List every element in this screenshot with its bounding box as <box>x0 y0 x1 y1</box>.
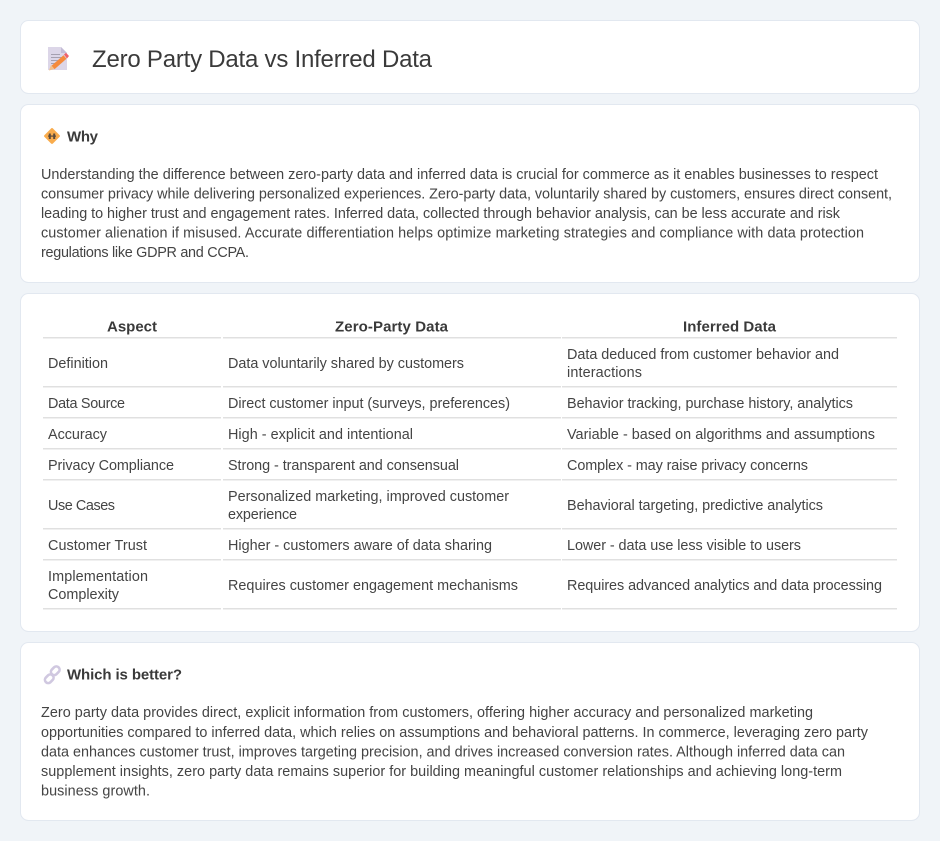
panel: which is better <box>20 642 920 820</box>
row: implementation complexity: Requires advanced analytics and data processing <box>567 578 882 594</box>
table header row <box>43 318 897 338</box>
panel: why <box>20 104 920 282</box>
row: accuracy <box>43 427 897 450</box>
text block: which is better paragraph <box>41 705 869 800</box>
row: privacy compliance: Privacy Compliance <box>48 458 174 474</box>
row: definition: Definition <box>48 356 108 372</box>
row: customer trust: Lower - data use less visible to users <box>567 538 801 554</box>
panel: comparison table <box>20 294 920 632</box>
row: customer trust <box>43 538 897 560</box>
table header row: Aspect <box>107 318 157 336</box>
heading: which is better: Which is better? <box>67 666 182 684</box>
row: accuracy: High - explicit and intentional <box>228 427 413 443</box>
text block: which is better paragraph: data enhances customer trust, improves targeting precision, and drives increased conversion rates. Although inferred data can <box>41 744 845 760</box>
row: use cases: experience <box>228 507 297 523</box>
row: privacy compliance: Strong - transparent and consensual <box>228 458 459 474</box>
row: implementation complexity <box>43 569 897 610</box>
text block: which is better paragraph: business growth. <box>41 784 150 800</box>
text block: why paragraph: leading to higher trust and engagement rates. Inferred data, collected through behavior analysis, can be less accurate and risk <box>41 206 841 222</box>
row: privacy compliance: Complex - may raise privacy concerns <box>567 458 808 474</box>
row: implementation complexity: Requires customer engagement mechanisms <box>228 578 518 594</box>
row: use cases: Use Cases <box>48 498 115 514</box>
title: Zero Party Data vs Inferred Data <box>92 46 433 73</box>
text block: which is better paragraph: Zero party data provides direct, explicit information from customers, offering higher accuracy and personalized marketing <box>41 705 813 721</box>
row: data source <box>43 396 897 418</box>
text block: why paragraph: consumer privacy while delivering personalized experiences. Zero-party data, voluntarily shared by customers, ensures direct consent, <box>41 186 892 202</box>
text block: why paragraph: regulations like GDPR and CCPA. <box>41 245 249 261</box>
row: use cases: Personalized marketing, improved customer <box>228 489 509 505</box>
icon: warning diamond <box>44 128 60 144</box>
text block: which is better paragraph: supplement insights, zero party data remains superior for building meaningful customer relationships and achieving long-term <box>41 764 842 780</box>
row: use cases: Behavioral targeting, predictive analytics <box>567 498 823 514</box>
row: data source: Behavior tracking, purchase history, analytics <box>567 396 853 412</box>
icon: memo and pencil <box>48 47 69 70</box>
text block: why paragraph <box>41 167 892 261</box>
row: definition: Data deduced from customer behavior and <box>567 347 839 363</box>
row: privacy compliance <box>43 458 897 480</box>
row: data source: Data Source <box>48 396 125 412</box>
row: definition: Data voluntarily shared by customers <box>228 356 464 372</box>
row: implementation complexity: Complexity <box>48 587 120 603</box>
row: data source: Direct customer input (surveys, preferences) <box>228 396 510 412</box>
table header row: Inferred Data <box>683 318 777 336</box>
text block: why paragraph: customer alienation if misused. Accurate differentiation helps optimize marketing strategies and compliance with data protection <box>41 226 864 242</box>
row: definition <box>43 347 897 388</box>
row: use cases <box>43 489 897 530</box>
icon: link <box>44 665 61 684</box>
panel: header <box>20 20 920 94</box>
row: implementation complexity: Implementation <box>48 569 148 585</box>
heading: why: Why <box>67 128 99 146</box>
row: definition: interactions <box>567 365 642 381</box>
row: customer trust: Customer Trust <box>48 538 147 554</box>
row: customer trust: Higher - customers aware of data sharing <box>228 538 492 554</box>
row: accuracy: Variable - based on algorithms and assumptions <box>567 427 875 443</box>
table header row: Zero-Party Data <box>335 318 449 336</box>
row: accuracy: Accuracy <box>48 427 108 443</box>
text block: why paragraph: Understanding the difference between zero-party data and inferred data is crucial for commerce as it enables businesses to respect <box>41 167 878 183</box>
text block: which is better paragraph: opportunities compared to inferred data, which relies on assumptions and behavioral patterns. In commerce, leveraging zero party <box>41 725 869 741</box>
